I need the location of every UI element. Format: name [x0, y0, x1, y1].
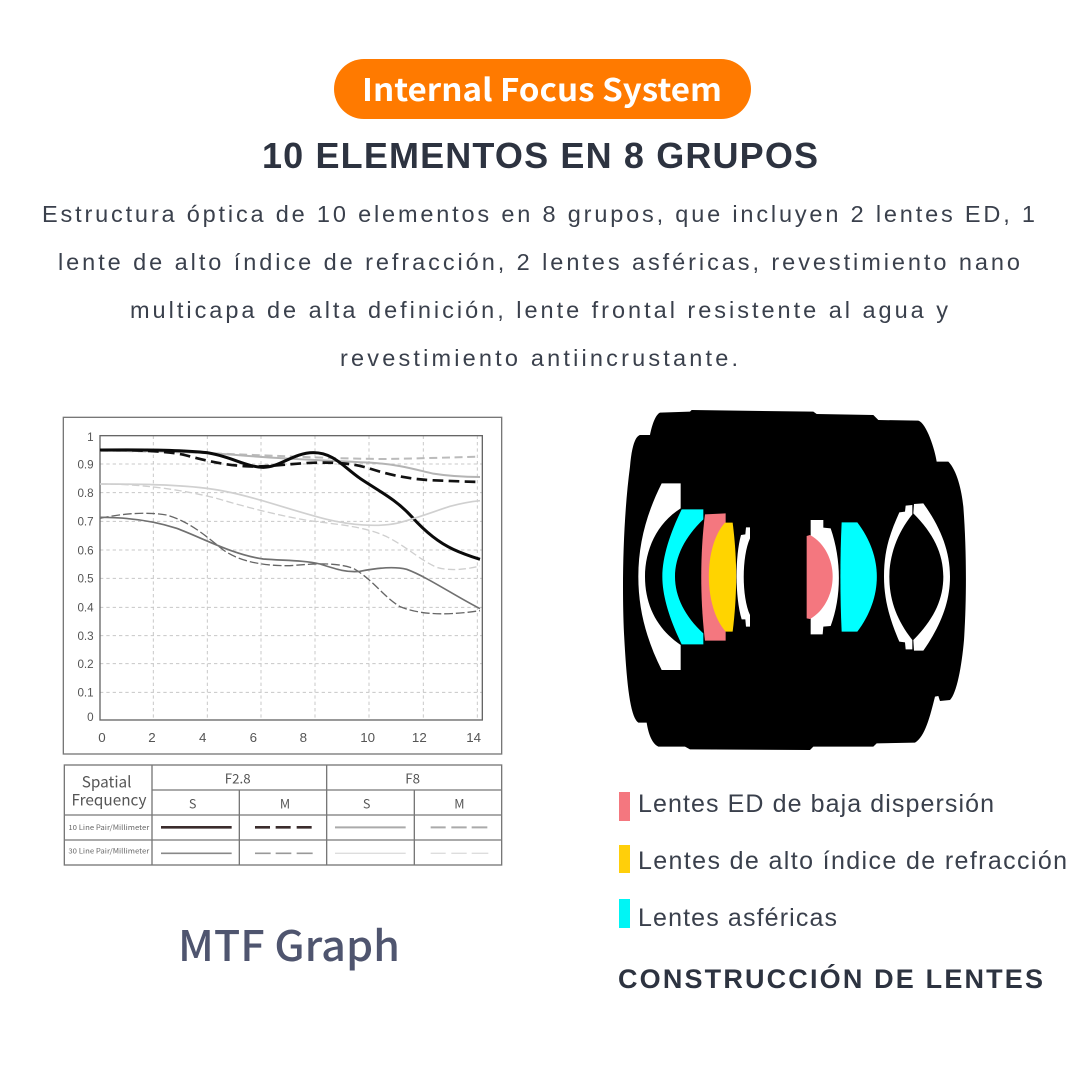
high index element — [709, 523, 736, 632]
description text: revestimiento antiincrustante. — [340, 345, 738, 371]
thin meniscus element — [737, 527, 750, 627]
x axis labels: 4 — [199, 730, 207, 745]
x axis labels: 6 — [250, 730, 257, 745]
curve: F8 M 10 lp/mm — [100, 451, 478, 459]
curve: F2.8 M 10 lp/mm — [100, 450, 480, 482]
rear doublet left — [884, 505, 912, 649]
description text: Estructura óptica de 10 elementos en 8 grupos, que incluyen 2 lentes ED, 1 — [42, 201, 1035, 227]
table row labels — [68, 823, 150, 857]
title: 10 ELEMENTOS EN 8 GRUPOS — [262, 135, 818, 176]
curve: F2.8 M 30 lp/mm — [100, 513, 480, 614]
ED element 2 — [807, 535, 833, 619]
curve: F2.8 S 10 lp/mm — [100, 450, 480, 559]
y axis labels: 0.7 — [77, 516, 94, 529]
x axis labels: 2 — [148, 730, 156, 745]
table row labels: 10 Line Pair/Millimeter — [68, 823, 150, 833]
x axis labels: 14 — [466, 730, 482, 745]
description text — [42, 201, 1035, 371]
table header text: F2.8 — [225, 768, 251, 787]
badge: Internal Focus System: Internal Focus System — [362, 65, 722, 110]
y axis labels: 0.8 — [77, 487, 94, 500]
rear white element — [811, 520, 839, 634]
legend: aspherical lenses: Lentes asféricas — [638, 904, 837, 932]
description text: multicapa de alta definición, lente frontal resistente al agua y — [130, 297, 948, 323]
table line samples — [161, 827, 488, 853]
table header text: F8 — [405, 768, 420, 787]
table header text: S — [363, 793, 370, 812]
MTF chart — [63, 417, 502, 754]
aspherical element 2 — [840, 522, 877, 632]
badge: Internal Focus System — [334, 59, 751, 119]
x axis labels: 10 — [360, 730, 375, 745]
description text: lente de alto índice de refracción, 2 lentes asféricas, revestimiento nano — [58, 249, 1020, 275]
lens construction heading: CONSTRUCCIÓN DE LENTES — [618, 963, 1043, 994]
x axis labels: 8 — [300, 730, 307, 745]
y axis labels: 0.1 — [77, 687, 94, 700]
lens construction diagram — [623, 410, 966, 750]
y axis labels — [77, 431, 94, 724]
y axis labels: 1 — [87, 431, 94, 444]
legend: high index lenses: Lentes de alto índice de refracción — [638, 847, 1067, 875]
table header text: Spatial — [82, 770, 132, 792]
MTF Graph caption: MTF Graph — [178, 913, 400, 974]
curve: F2.8 S 30 lp/mm — [100, 517, 480, 609]
table header text — [72, 768, 464, 812]
lens barrel — [623, 410, 966, 750]
table row labels: 30 Line Pair/Millimeter — [68, 847, 150, 857]
curve: F8 M 30 lp/mm — [100, 484, 480, 570]
front element — [638, 483, 681, 670]
legend: ED lenses: Lentes ED de baja dispersión — [638, 790, 994, 818]
y axis labels: 0.3 — [77, 630, 94, 643]
aspherical element 1 — [662, 509, 703, 644]
x axis labels: 12 — [412, 730, 427, 745]
table header text: M — [454, 793, 464, 812]
y axis labels: 0.4 — [77, 602, 94, 615]
table header text: Frequency — [72, 789, 146, 811]
y axis labels: 0.2 — [77, 658, 94, 671]
MTF legend table — [64, 765, 502, 865]
ED element 1 — [701, 513, 726, 641]
table header text: S — [189, 793, 196, 812]
y axis labels: 0.6 — [77, 544, 94, 557]
y axis labels: 0 — [87, 711, 94, 724]
y axis labels: 0.5 — [77, 573, 94, 586]
y axis labels: 0.9 — [77, 458, 94, 471]
table header text: M — [280, 793, 290, 812]
rear doublet right — [913, 503, 950, 651]
x axis labels: 0 — [98, 730, 106, 745]
curve: F8 S 10 lp/mm — [100, 451, 480, 477]
x axis labels — [98, 730, 482, 745]
curve: F8 S 30 lp/mm — [100, 484, 480, 525]
